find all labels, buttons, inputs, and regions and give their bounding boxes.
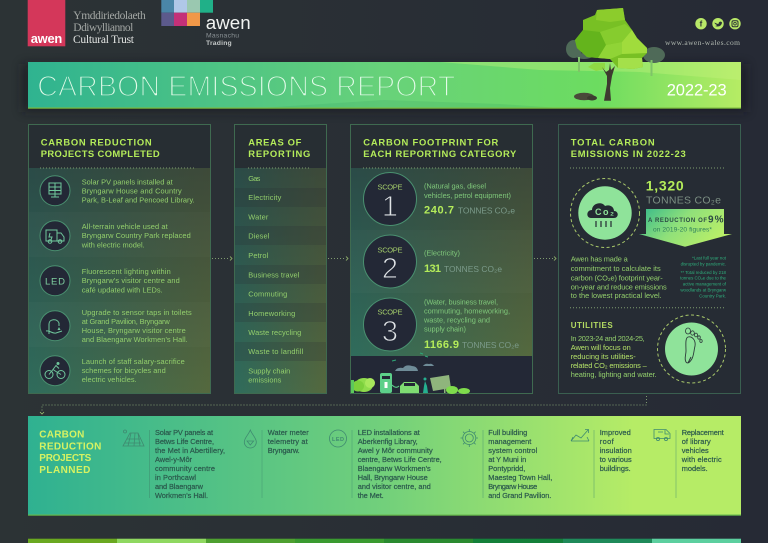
scope 1: (Natural gas, diesel [424,182,486,190]
panel: carbon reduction projects completed [28,124,211,394]
scope 3: SCOPE [378,308,402,317]
scope 3: 3 [382,316,398,348]
project: water telemetry [244,428,309,498]
scope 2 [364,235,502,288]
project: electric library vehicles [654,428,724,498]
project: building management [460,428,552,500]
year: 2022-23 [667,82,727,100]
scope 3 [364,298,519,351]
heading [41,136,160,159]
logo: Awen Trading: Masnachu [206,32,239,40]
logo: Awen Trading: awen [206,12,251,33]
project: building management: at Y Muni in [488,455,526,464]
project: LED installations: centre, Betws Life Centre, [358,455,442,464]
title banner [28,62,741,109]
item: bicycles: Launch of staff salary-sacrifice [82,357,185,366]
utilities text: In 2023-24 and 2024-25, [571,334,645,343]
item: solar panels: Park, B-Leaf and Pencoed Library. [82,196,195,204]
project: building management: management [488,437,531,446]
heading [571,136,686,159]
panel: carbon footprint for each reporting category [350,124,533,394]
social icons and website: www.awen-wales.com [665,38,740,47]
logo: Awen Cultural Trust: Ymddiriedolaeth [73,10,146,22]
reporting areas list: Commuting [248,290,287,298]
project: LED installations: Aberkenfig Library, [358,437,418,446]
item: bicycles: schemes for bicycles and [82,366,166,375]
project: solar panels: in Porthcawl [155,473,196,482]
total figure: TONNES CO₂e [646,194,721,206]
panel: carbon reduction projects planned [28,416,741,516]
footnotes: ** Total reduced by 218 [681,270,727,275]
item: sensor taps: and Blaengarw Workmen's Hall. [82,335,188,344]
footnotes: disrupted by pandemic. [681,262,726,266]
project: solar panels: Workmen's Hall. [155,491,208,500]
scope 1: 240.7 [424,204,454,216]
social icons and website: f [700,20,703,28]
callout: reduction of 9%: A REDUCTION OF [648,218,707,224]
project: electric library vehicles: models. [682,464,708,473]
heading: REDUCTION [39,442,101,452]
project: roof insulation: buildings. [600,464,631,473]
illustration: tree [566,8,665,101]
project: building management: Pontypridd, [488,464,525,473]
commitment text: on-year and reduce emissions [571,282,667,292]
commitment text: to the lowest practical level. [571,291,662,300]
project: building management: Maesteg Town Hall, [488,473,552,482]
scope 3: commuting, homeworking, [424,306,510,316]
heading: CARBON [39,430,84,440]
item: sensor taps: at Grand Pavilion, Bryngarw [82,317,170,326]
commitment text: Awen has made a [571,254,629,264]
callout: reduction of 9%: 9% [708,214,724,226]
project: roof insulation: insulation [600,446,632,455]
scope 3: 1166.9 [424,339,459,351]
reporting areas list: Diesel [248,232,270,240]
item: bicycles: electric vehicles. [82,375,137,384]
total figure [646,178,721,206]
illustration: EV charging scene [351,353,470,394]
scope 2: TONNES CO₂e [444,264,502,274]
social icons and website [665,18,741,47]
project: solar panels [123,428,225,500]
logo: Awen Cultural Trust: Cultural Trust [73,34,135,46]
footer colour bar [28,539,741,543]
item: solar panels: Bryngarw House and Country [82,186,182,196]
project: water telemetry: Water meter [268,428,309,437]
utilities text: Awen will focus on [571,343,631,352]
utilities text: reducing its utilities- [571,352,636,361]
scope 3: TONNES CO₂e [462,340,519,350]
logo: Awen Trading: Trading [206,40,232,47]
item: LED lighting: café updated with LEDs. [82,286,163,294]
heading: AREAS OF [248,136,302,147]
project: roof insulation: Improved [600,428,631,437]
item: sensor taps: House, Bryngarw visitor centre [82,326,186,335]
footnotes: woodlands at Bryngarw [680,288,727,292]
scope 1: SCOPE [378,183,402,192]
heading: CARBON FOOTPRINT FOR [363,136,499,147]
commitment text: commitment to calculate its [571,264,661,273]
heading: CARBON REDUCTION [41,136,152,147]
utilities text: related CO₂ emissions – [571,361,648,370]
commitment text: carbon (CO₂e) footprint year- [571,274,663,282]
connector arrows between panels [40,256,646,414]
project: solar panels: Solar PV panels at [155,428,213,437]
project: building management: and Grand Pavilion. [488,491,551,500]
scope 2: 131 [424,263,441,275]
project: building management: Bryngarw House [488,482,537,491]
heading [248,136,310,159]
footnotes: tonnes CO₂e due to the [680,276,727,280]
project: electric library vehicles: vehicles [682,446,709,455]
footnotes: active management of [683,282,727,286]
banner shadow [22,64,747,112]
scope 1: vehicles, petrol equipment) [424,191,511,200]
item: electric vehicle [40,221,191,251]
project: LED installations: and visitor centre, and [358,482,431,491]
project: solar panels: the Met in Abertillery, [155,446,225,455]
project: electric library vehicles: with electric [681,455,722,464]
utilities text: UTILITIES [571,321,613,330]
project: LED installations: Hall, Bryngarw House [358,473,428,482]
reporting areas list: Waste to landfill [248,347,304,356]
reporting areas list: Supply chain [248,366,290,376]
scope 3: waste, recycling and [423,316,490,324]
project: solar panels: community centre [155,464,215,473]
item: solar panels: Solar PV panels installed at [82,178,173,186]
project: water telemetry: telemetry at [268,437,308,446]
project: LED installations: the Met. [358,491,384,500]
scope 3: supply chain) [424,324,466,334]
callout: reduction of 9% [639,209,732,247]
scope 1: TONNES CO₂e [458,206,515,216]
heading: PROJECTS [39,453,92,464]
project: electric library vehicles: of library [682,437,711,446]
logo: Awen Cultural Trust [28,0,146,46]
utilities text: heating, lighting and water. [571,370,657,379]
project: roof insulation [571,428,632,498]
heading: PROJECTS COMPLETED [41,148,160,159]
project: LED installations: Awel y Môr community [358,446,433,455]
project: LED installations: Blaengarw Workmen's [358,464,431,473]
item: sensor taps [40,308,192,344]
heading: REPORTING [248,148,310,159]
item: sensor taps: Upgrade to sensor taps in toilets [82,308,192,317]
icon: carbon footprint [658,315,726,383]
reporting areas list: Gas [248,174,261,183]
project: LED installations [330,428,442,500]
project: building management: Full building [488,428,527,437]
total figure: 1,320 [646,178,684,194]
project: roof insulation: to various [600,455,632,464]
item: electric vehicle: Bryngarw Country Park replaced [82,231,191,240]
project: solar panels: Betws Life Centre, [155,437,214,446]
project: building management: system control [488,446,538,455]
scope 2: SCOPE [378,246,402,255]
item: LED lighting: LED [45,276,65,288]
icon: CO2 cloud: Co₂ [595,207,614,217]
panel: areas of reporting [234,124,327,394]
heading: EMISSIONS IN 2022-23 [571,148,686,159]
logo: Awen Cultural Trust: awen [31,31,62,46]
footnotes: *Last full year not [692,256,727,260]
footnotes: Country Park. [699,294,726,298]
logo: Awen Trading [161,0,251,47]
item: LED lighting: Fluorescent lighting within [82,267,171,276]
project: LED installations: LED installations at [358,428,420,437]
reporting areas list: emissions [248,376,282,384]
scope 2: (Electricity) [424,248,460,258]
panel: total carbon emissions [558,124,740,394]
reporting areas list: Petrol [248,251,269,260]
reporting areas list: Business travel [248,270,300,280]
reporting areas list [248,174,304,384]
reporting areas list: Electricity [248,193,282,202]
scope 2: 2 [382,253,398,285]
scope 1 [364,172,515,226]
item: electric vehicle: with electric model. [81,240,145,250]
item: electric vehicle: All-terrain vehicle used at [82,222,168,231]
item: bicycles [40,356,185,386]
footnotes [680,256,727,298]
project: roof insulation: roof [600,437,615,446]
item: LED lighting: Bryngarw's visitor centre and [82,276,180,285]
heading: PLANNED [39,465,90,476]
project: electric library vehicles: Replacement [682,428,724,437]
heading [39,430,101,476]
project: water telemetry: Bryngarw. [268,446,300,455]
heading: TOTAL CARBON [571,136,655,147]
project: LED installations: LED [332,437,344,443]
scope 3: (Water, business travel, [424,298,498,306]
commitment text [571,254,667,300]
heading: EACH REPORTING CATEGORY [363,148,517,159]
project: solar panels: and Blaengarw [155,482,204,491]
reporting areas list: Water [248,212,269,222]
item: solar panels [40,176,195,206]
reporting areas list: Homeworking [248,309,295,318]
project: solar panels: Awel-y-Môr [155,455,193,464]
callout: reduction of 9%: on 2019-20 figures* [653,226,712,234]
utilities text [571,321,657,379]
item: LED lighting [40,266,180,296]
logo: Awen Cultural Trust: Ddiwylliannol [73,22,133,34]
title: CARBON EMISSIONS REPORT [37,71,455,103]
heading [363,136,517,159]
reporting areas list: Waste recycling [248,328,301,337]
scope 1: 1 [382,191,398,223]
icon: CO2 cloud [570,178,640,248]
